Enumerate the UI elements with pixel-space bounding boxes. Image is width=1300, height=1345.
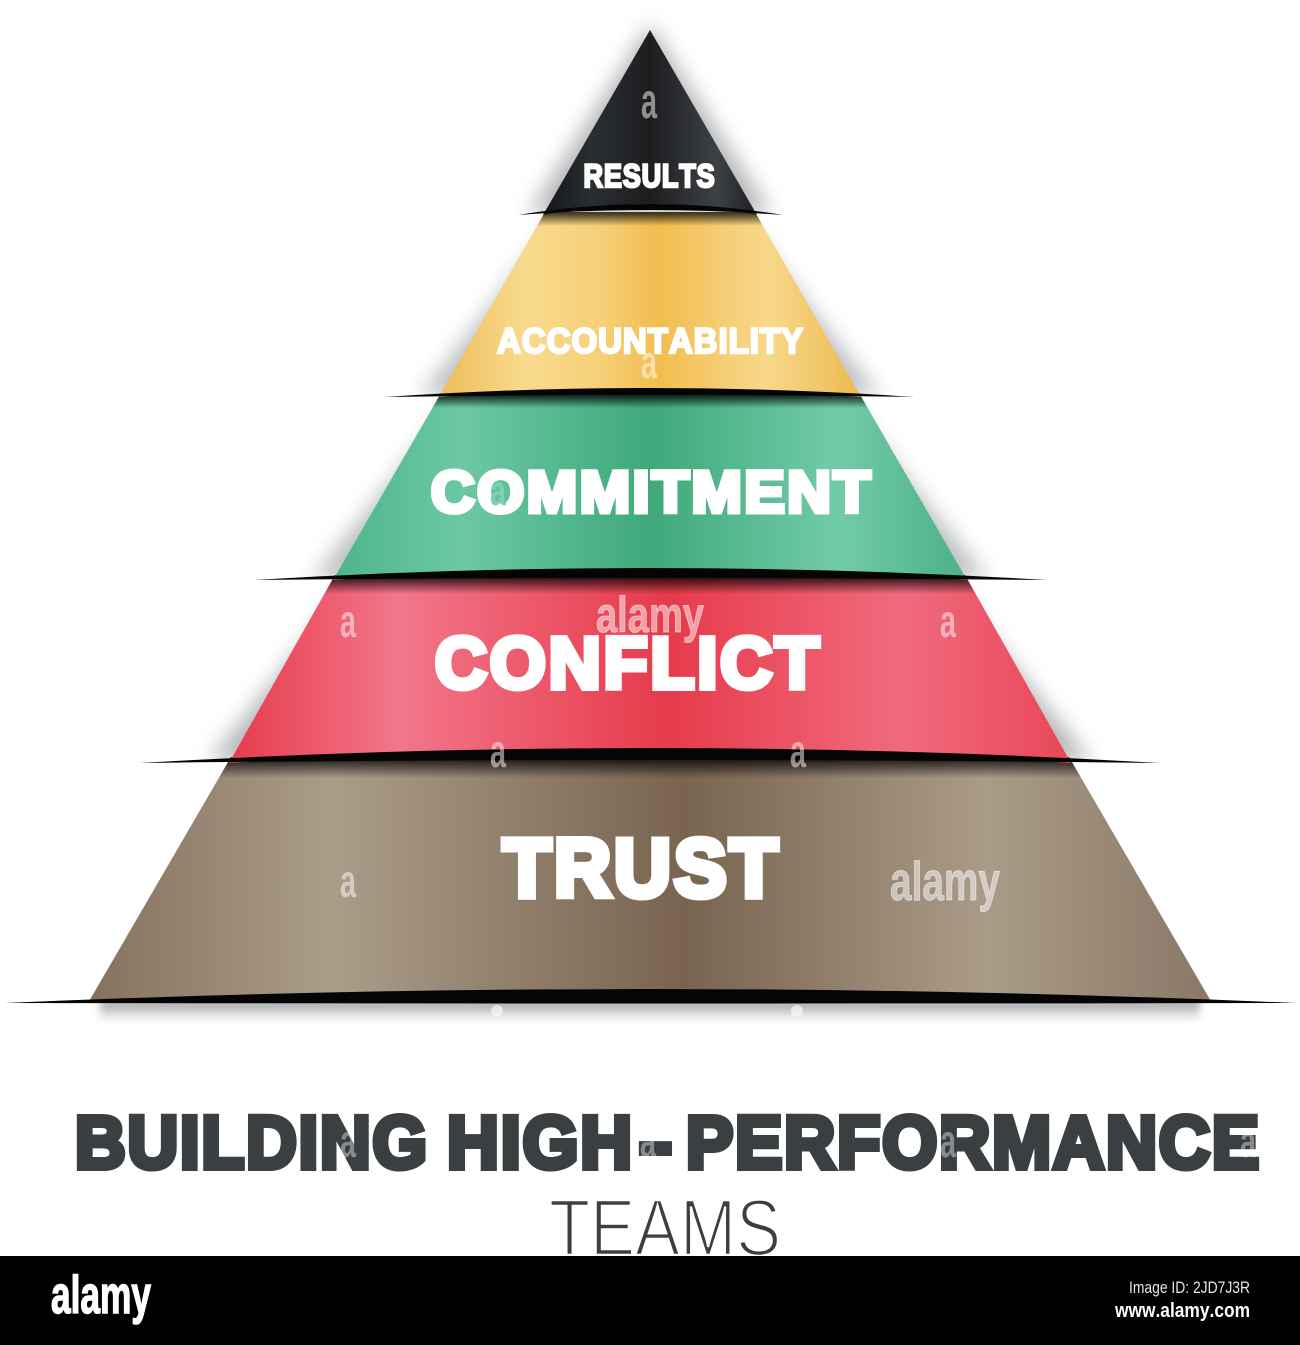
watermarks: a (340, 595, 356, 647)
label: trust: TRUST (503, 823, 781, 914)
watermarks: a (490, 725, 506, 777)
label: accountability: ACCOUNTABILITY (497, 322, 804, 361)
title: building high-performance (75, 1101, 1261, 1184)
title: building high-performance: PERFORMANCE (686, 1101, 1261, 1184)
watermarks: alamy (596, 587, 704, 643)
tier: commitment (333, 388, 967, 580)
floor shadow under pyramid (100, 1000, 1200, 1022)
image id: Image ID: 2JD7J3R (1129, 1278, 1250, 1297)
tier: results (543, 30, 757, 215)
title: building high-performance: BUILDING (75, 1101, 429, 1184)
title watermarks (340, 1115, 1256, 1167)
tier separators (5, 204, 1295, 1004)
watermarks (340, 73, 1000, 912)
floor watermark fragments (491, 1005, 803, 1017)
title watermarks: a (340, 1115, 356, 1167)
label: results: RESULTS (584, 158, 716, 194)
tier: accountability (439, 204, 861, 397)
watermarks: a (641, 73, 658, 129)
title watermarks: a (940, 1115, 956, 1167)
title: building high-performance: HIGH (447, 1101, 634, 1184)
footer bar (0, 1256, 1300, 1345)
tier: trust (88, 748, 1212, 1003)
title watermarks: a (640, 1115, 656, 1167)
pyramid side shadow (208, 24, 1092, 762)
subtitle: teams: TEAMS (549, 1183, 781, 1272)
website: www.alamy.com (1114, 1300, 1250, 1322)
tier: conflict (229, 568, 1071, 763)
title watermarks: a (1240, 1115, 1256, 1167)
title: building high-performance: - (639, 1101, 672, 1184)
footer logo: alamy (51, 1266, 151, 1325)
label: commitment: COMMITMENT (431, 460, 873, 525)
watermarks: alamy (890, 850, 1000, 912)
watermarks: a (940, 595, 956, 647)
label: conflict: CONFLICT (435, 624, 822, 704)
watermarks: a (790, 725, 806, 777)
watermarks: a (641, 336, 657, 388)
watermarks: a (340, 855, 356, 907)
commitment watermark: a (490, 467, 506, 514)
